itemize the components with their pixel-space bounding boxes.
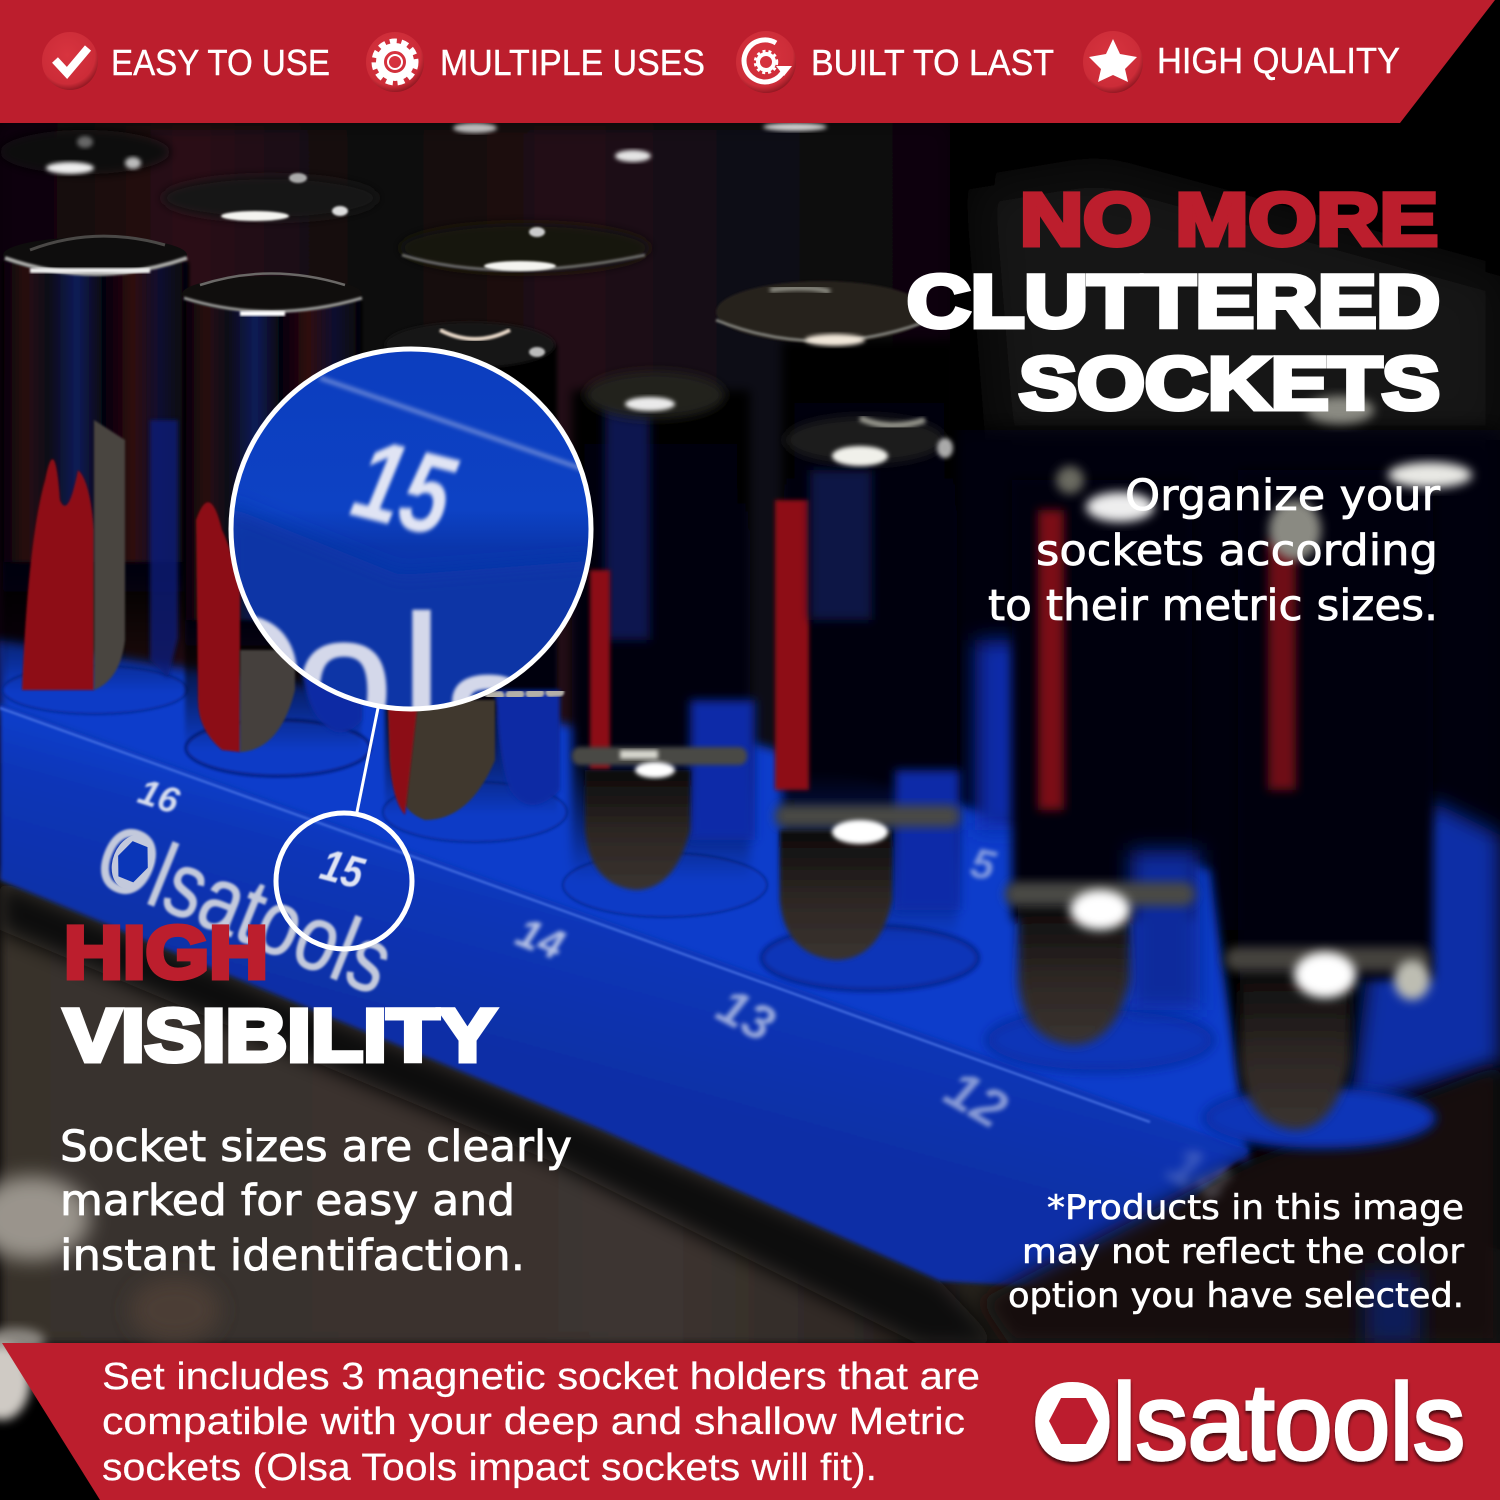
socket 1 (3, 236, 188, 714)
disclaimer note: option you have selected. (1008, 1276, 1464, 1316)
icon: gear badge (366, 32, 424, 92)
set description (102, 1356, 980, 1489)
icon: cycle badge (736, 31, 796, 93)
socket 7 (1205, 396, 1472, 1148)
text block: organize your sockets (988, 471, 1440, 631)
set description: sockets (Olsa Tools impact sockets will fit). (102, 1447, 877, 1489)
blue rack top surface (0, 640, 1250, 1165)
text block: organize your sockets: sockets according (1036, 526, 1438, 576)
icon: check badge (42, 32, 98, 90)
icon: star badge (1083, 31, 1143, 93)
text block: socket sizes (60, 1122, 572, 1281)
dark foreground corner (980, 1065, 1500, 1345)
text block: socket sizes: instant identifaction. (60, 1231, 525, 1281)
text block: organize your sockets: Organize your (1125, 471, 1440, 521)
heading: high visibility (64, 911, 496, 1077)
text block: organize your sockets: to their metric sizes. (988, 581, 1438, 631)
socket 2 (182, 274, 370, 776)
rack front face (0, 704, 1250, 1290)
heading: no more cluttered sockets: NO MORE (1020, 178, 1438, 261)
rack size numbers: 16 (133, 770, 185, 822)
rack size numbers: 13 (708, 977, 784, 1053)
rack printed logo: Olsatools (83, 804, 406, 1014)
heading: no more cluttered sockets: SOCKETS (1019, 342, 1440, 425)
logo: Olsatools (1032, 1361, 1465, 1482)
rack shadow on mat (0, 880, 1000, 1345)
connector line (357, 708, 378, 812)
disclaimer note (1008, 1188, 1464, 1316)
large zoom lens: 15 (342, 415, 467, 562)
heading: no more cluttered sockets: CLUTTERED (907, 260, 1440, 343)
disclaimer note: may not reflect the color (1022, 1232, 1464, 1272)
label: built to last: BUILT TO LAST (811, 42, 1054, 83)
large zoom lens: Ools (168, 581, 532, 808)
label: high quality: HIGH QUALITY (1157, 40, 1400, 81)
disclaimer note: *Products in this image (1047, 1188, 1464, 1228)
socket 6 (975, 466, 1212, 1070)
work mat (0, 870, 1500, 1345)
set description: compatible with your deep and shallow Metric (102, 1401, 965, 1443)
blue glimpse at bottom right (1365, 1270, 1420, 1345)
large zoom lens (228, 346, 594, 712)
heading: high visibility: VISIBILITY (64, 994, 496, 1077)
top banner (0, 0, 1495, 123)
rack size numbers: 12 (935, 1058, 1017, 1140)
rack size numbers: 14 (510, 908, 571, 969)
back row socket heads (0, 123, 827, 273)
text block: socket sizes: marked for easy and (60, 1176, 515, 1226)
socket 3 (383, 322, 567, 842)
rack size numbers: 14 (1158, 1133, 1240, 1215)
background upper far sockets (0, 123, 1500, 930)
socket 5 (716, 281, 978, 990)
heading: high visibility: HIGH (64, 911, 268, 994)
socket 4 (563, 371, 767, 917)
label: easy to use: EASY TO USE (111, 42, 330, 83)
text block: socket sizes: Socket sizes are clearly (60, 1122, 572, 1172)
blurred objects on the mat (0, 1176, 220, 1352)
label: multiple uses: MULTIPLE USES (440, 42, 705, 83)
far right rack (1350, 800, 1500, 1110)
rack size numbers: 5 (967, 838, 1000, 889)
bottom banner (0, 1343, 1500, 1500)
magnifier callout (228, 346, 594, 952)
rack size numbers (133, 770, 1240, 1215)
small ring around 15: 15 (315, 838, 370, 899)
set description: Set includes 3 magnetic socket holders that are (102, 1356, 980, 1398)
heading: no more cluttered sockets (907, 178, 1440, 425)
rack edge highlight (0, 708, 1150, 1122)
small ring around 15 (276, 813, 412, 949)
